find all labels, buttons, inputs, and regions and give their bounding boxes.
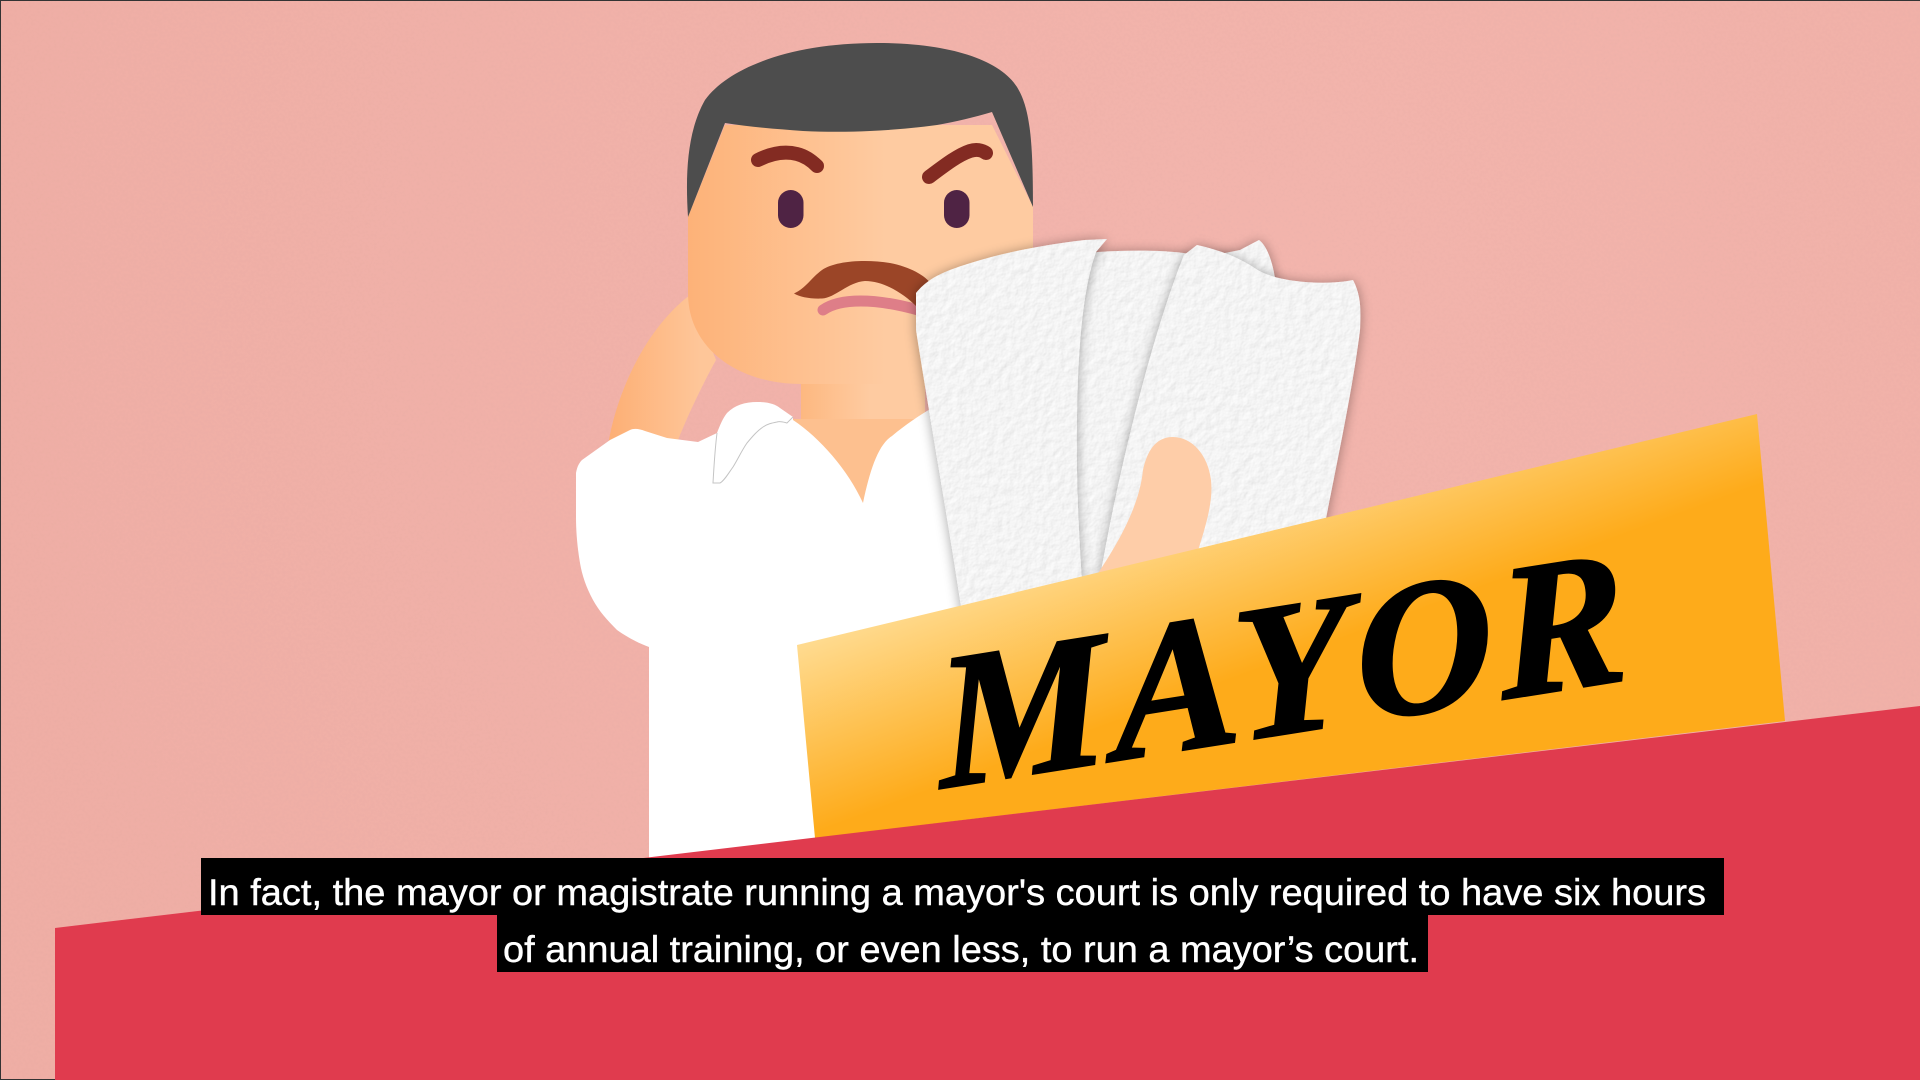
right paper <box>1090 245 1360 640</box>
hair <box>687 43 1033 217</box>
caption <box>201 858 1724 972</box>
right eye <box>944 190 970 228</box>
raised arm <box>608 295 716 445</box>
neck and chest <box>801 380 925 420</box>
banner <box>797 414 1785 838</box>
back paper <box>1180 240 1276 340</box>
right eyebrow <box>929 150 986 177</box>
moustache <box>794 261 932 306</box>
red ground <box>55 706 1920 1080</box>
left eye <box>778 190 804 228</box>
face <box>688 125 1033 384</box>
left paper <box>916 239 1107 640</box>
thumb <box>1090 437 1211 585</box>
papers <box>916 239 1360 640</box>
caption backgrounds <box>201 858 1724 972</box>
shirt <box>576 402 1000 900</box>
left eyebrow <box>758 153 817 166</box>
caption line 1: In fact, the mayor or magistrate running a mayor's court is only required to have six hours <box>208 872 1706 913</box>
caption line 2: of annual training, or even less, to run a mayor’s court. <box>503 929 1419 970</box>
character: mayor <box>576 43 1033 900</box>
mouth <box>823 301 918 310</box>
middle paper <box>1050 251 1190 640</box>
banner title: MAYOR <box>927 508 1632 830</box>
chest skin <box>790 419 932 510</box>
shirt collar line <box>713 417 793 483</box>
banner shape <box>797 414 1785 838</box>
